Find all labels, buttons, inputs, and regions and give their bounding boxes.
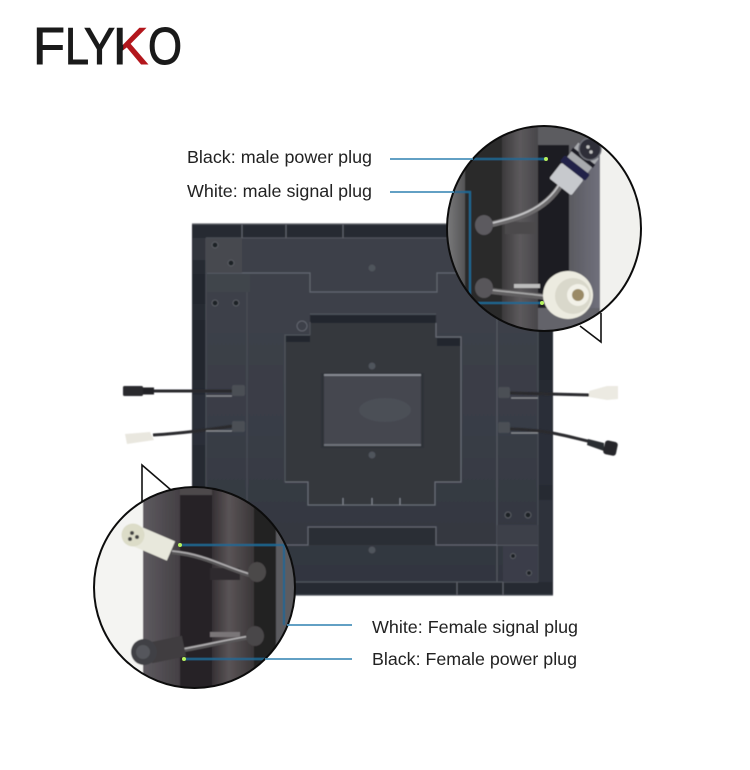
- green target dots: [178, 157, 548, 661]
- inner teal leader segments: [452, 159, 546, 303]
- right upper cable with white plug: [498, 386, 618, 400]
- right lower cable with black plug: [498, 422, 618, 456]
- cable to black plug: [183, 637, 250, 650]
- leader lines: [265, 159, 473, 659]
- logo: FLYKO: F: [33, 18, 65, 76]
- moulded bumps: [297, 264, 376, 554]
- circle outline: [447, 126, 641, 331]
- black plug: [150, 646, 184, 653]
- leader: male signal plug: [390, 191, 454, 193]
- cable to black plug: [484, 184, 561, 226]
- logo: FLYKO: [33, 18, 182, 76]
- screw holes: [212, 242, 532, 576]
- label: male power plug: Black: male power plug: [187, 147, 372, 167]
- logo: FLYKO: L: [65, 18, 89, 76]
- cable nuts: [248, 562, 266, 582]
- label: female power plug: Black: Female power plug: [372, 649, 577, 669]
- label: female signal plug: White: Female signal plug: [372, 617, 578, 637]
- shelf brackets: [210, 568, 240, 580]
- circle outline: [94, 487, 295, 688]
- logo: FLYKO: K: [113, 18, 148, 76]
- logo: FLYKO: O: [148, 18, 182, 76]
- centre cover: [321, 373, 424, 448]
- label: male signal plug: White: male signal plug: [187, 181, 372, 201]
- left upper cable with black plug: [123, 385, 245, 396]
- black plug: [549, 142, 599, 196]
- white plug: [543, 271, 593, 319]
- leader: male power plug: [390, 158, 473, 160]
- cable nuts: [475, 215, 493, 235]
- leader: female signal plug: [287, 624, 352, 626]
- magnified circle: male plugs: [446, 125, 642, 332]
- left cable assemblies: [123, 385, 245, 444]
- inner teal leader segments: [180, 545, 284, 659]
- panel outer frame: [192, 224, 553, 595]
- callout pointer: male plugs: [580, 313, 601, 342]
- magnified circle: female plugs: [90, 480, 300, 695]
- corner blocks: [206, 238, 242, 273]
- cable to white plug: [172, 552, 250, 575]
- recessed stepped centre: [285, 323, 461, 505]
- logo: FLYKO: Y: [84, 18, 115, 76]
- callout pointer: female plugs: [142, 465, 171, 503]
- dark slots: [193, 238, 552, 582]
- labels: [187, 147, 578, 669]
- cable to white plug: [484, 290, 545, 297]
- white plug: [136, 536, 171, 551]
- leader: female power plug: [265, 658, 352, 660]
- moulded ridges: [192, 224, 553, 595]
- left lower cable with white plug: [125, 421, 245, 444]
- right cable assemblies: [498, 386, 618, 456]
- panel inner surface: [206, 238, 538, 582]
- shine bars: [514, 284, 540, 288]
- LED panel back view: [192, 224, 553, 595]
